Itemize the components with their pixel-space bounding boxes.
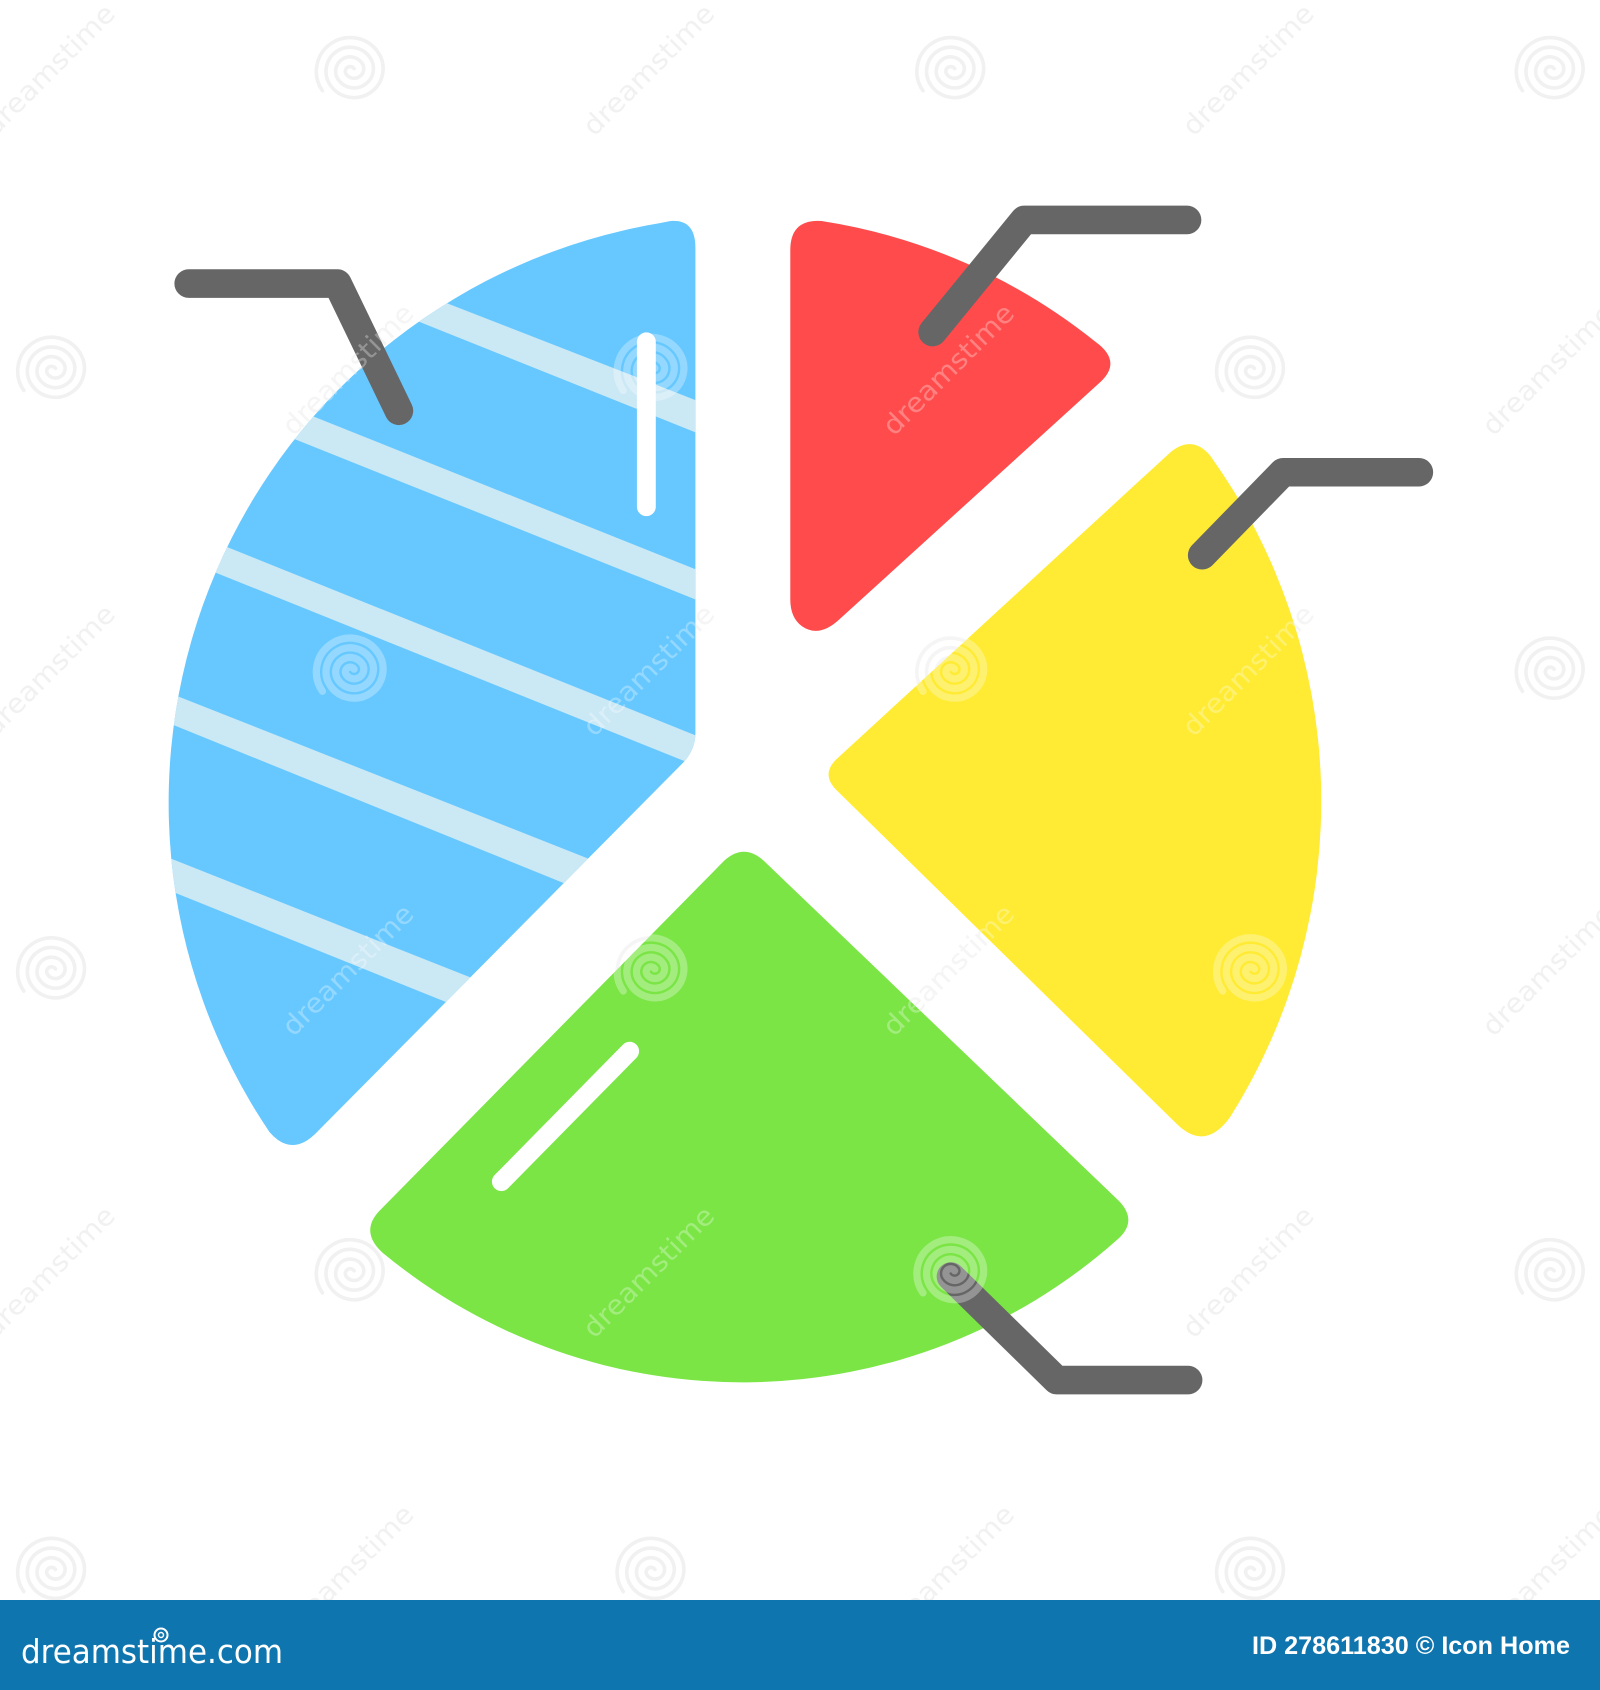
translucent white watermarks over the chart: dreamstime bbox=[276, 898, 420, 1042]
footer logo: dreamstime.com: dreamstime.com bbox=[21, 1632, 283, 1671]
faint watermarks on white background: dreamstime bbox=[1177, 0, 1321, 142]
faint watermarks on white background: dreamstime bbox=[276, 898, 420, 1042]
pie slice: blue striped bbox=[140, 221, 701, 1145]
leader line: red slice bbox=[933, 220, 1187, 332]
translucent white watermarks over the chart bbox=[276, 298, 1321, 1344]
pie slice: yellow bbox=[829, 444, 1321, 1136]
faint watermarks on white background: dreamstime bbox=[877, 298, 1021, 442]
leader line: blue slice bbox=[189, 284, 399, 411]
leader line: yellow slice bbox=[1202, 472, 1419, 555]
faint watermarks on white background: dreamstime bbox=[577, 0, 721, 142]
translucent white watermarks over the chart: dreamstime bbox=[877, 298, 1021, 442]
footer credit: image ID and author: ID 278611830 © Icon Home bbox=[1252, 1632, 1570, 1660]
faint watermarks on white background: dreamstime bbox=[276, 298, 420, 442]
faint watermarks on white background: dreamstime bbox=[577, 1200, 721, 1344]
highlight: white diagonal bar on green slice bbox=[501, 1051, 630, 1182]
faint watermarks on white background: dreamstime bbox=[276, 1499, 420, 1643]
pie slice: red bbox=[790, 221, 1110, 631]
faint watermarks on white background: dreamstime bbox=[1177, 1200, 1321, 1344]
faint watermarks on white background: dreamstime bbox=[877, 898, 1021, 1042]
translucent white watermarks over the chart: dreamstime bbox=[577, 1200, 721, 1344]
leader line: green slice bbox=[951, 1277, 1188, 1380]
faint watermarks on white background: dreamstime bbox=[577, 599, 721, 743]
footer banner bbox=[0, 1600, 1600, 1690]
faint watermarks on white background: dreamstime bbox=[877, 1499, 1021, 1643]
translucent white watermarks over the chart: dreamstime bbox=[577, 599, 721, 743]
translucent white watermarks over the chart: dreamstime bbox=[877, 898, 1021, 1042]
highlight: white vertical bar on blue slice bbox=[638, 342, 655, 507]
pie slice: green bbox=[370, 852, 1128, 1382]
translucent white watermarks over the chart: dreamstime bbox=[1177, 599, 1321, 743]
translucent white watermarks over the chart: dreamstime bbox=[276, 298, 420, 442]
faint watermarks on white background: dreamstime bbox=[1177, 599, 1321, 743]
